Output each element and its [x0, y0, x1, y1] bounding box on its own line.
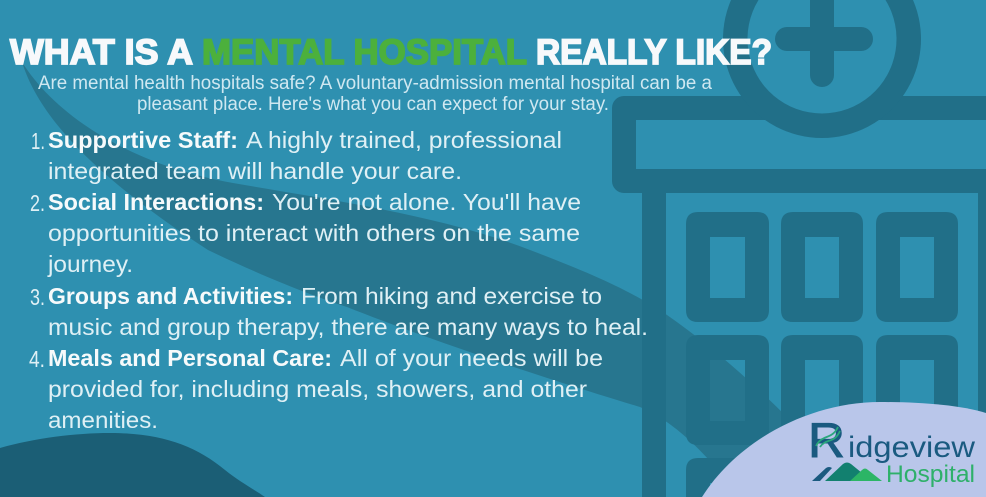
hospital windows [686, 212, 958, 497]
list item 3: groups and activities: music and group therapy, there are many ways to heal. [48, 314, 648, 340]
list item 2: social interactions: You're not alone. You'll have [272, 189, 581, 215]
list item 3: groups and activities: Groups and Activities: [48, 283, 293, 309]
list item 2: social interactions [30, 189, 581, 277]
logo badge background [702, 402, 986, 497]
list item 4: meals and personal care: Meals and Personal Care: [48, 345, 332, 371]
logo wordmark ridgeview: idgeview [848, 431, 975, 464]
title: WHAT IS A [10, 33, 193, 72]
hospital medical circle [723, 0, 921, 138]
list item 3: groups and activities: From hiking and exercise to [301, 283, 602, 309]
list item 2: social interactions: journey. [47, 251, 133, 277]
background swoosh [22, 62, 850, 497]
hospital roof band [612, 96, 986, 193]
background shape: bottom-left hill [0, 433, 265, 497]
list item 4: meals and personal care: All of your needs will be [340, 345, 603, 371]
list item 2: social interactions: 2. [30, 190, 45, 216]
logo mountains [812, 462, 882, 481]
subtitle [38, 73, 712, 115]
list item 3: groups and activities: 3. [30, 284, 45, 310]
list item 3: groups and activities [30, 283, 648, 340]
list item 4: meals and personal care: amenities. [48, 407, 158, 433]
hospital circle interior [748, 0, 896, 113]
list item 1: supportive staff: 1. [31, 128, 45, 154]
hospital plus sign [787, 0, 861, 75]
logo wordmark hospital: Hospital [886, 461, 975, 488]
title: REALLY LIKE? [536, 33, 772, 72]
list item 1: supportive staff: Supportive Staff: [48, 127, 238, 153]
hospital walls [642, 193, 986, 497]
numbered list [29, 127, 648, 433]
list item 4: meals and personal care [29, 345, 603, 433]
logo wordmark R: R [808, 414, 845, 468]
list item 4: meals and personal care: 4. [29, 346, 45, 372]
title: MENTAL HOSPITAL [202, 33, 527, 72]
list item 2: social interactions: opportunities to interact with others on the same [48, 220, 580, 246]
list item 1: supportive staff: integrated team will handle your care. [48, 158, 462, 184]
list item 2: social interactions: Social Interactions: [48, 189, 264, 215]
logo R swoosh [816, 427, 840, 447]
logo: Ridgeview Hospital [808, 414, 975, 488]
list item 1: supportive staff: A highly trained, professional [246, 127, 562, 153]
title [10, 33, 772, 72]
subtitle: Are mental health hospitals safe? A voluntary-admission mental hospital can be a [38, 73, 712, 94]
icon: hospital building [612, 0, 986, 497]
list item 1: supportive staff [31, 127, 562, 184]
subtitle: pleasant place. Here's what you can expect for your stay. [137, 94, 609, 115]
list item 4: meals and personal care: provided for, including meals, showers, and other [48, 376, 587, 402]
